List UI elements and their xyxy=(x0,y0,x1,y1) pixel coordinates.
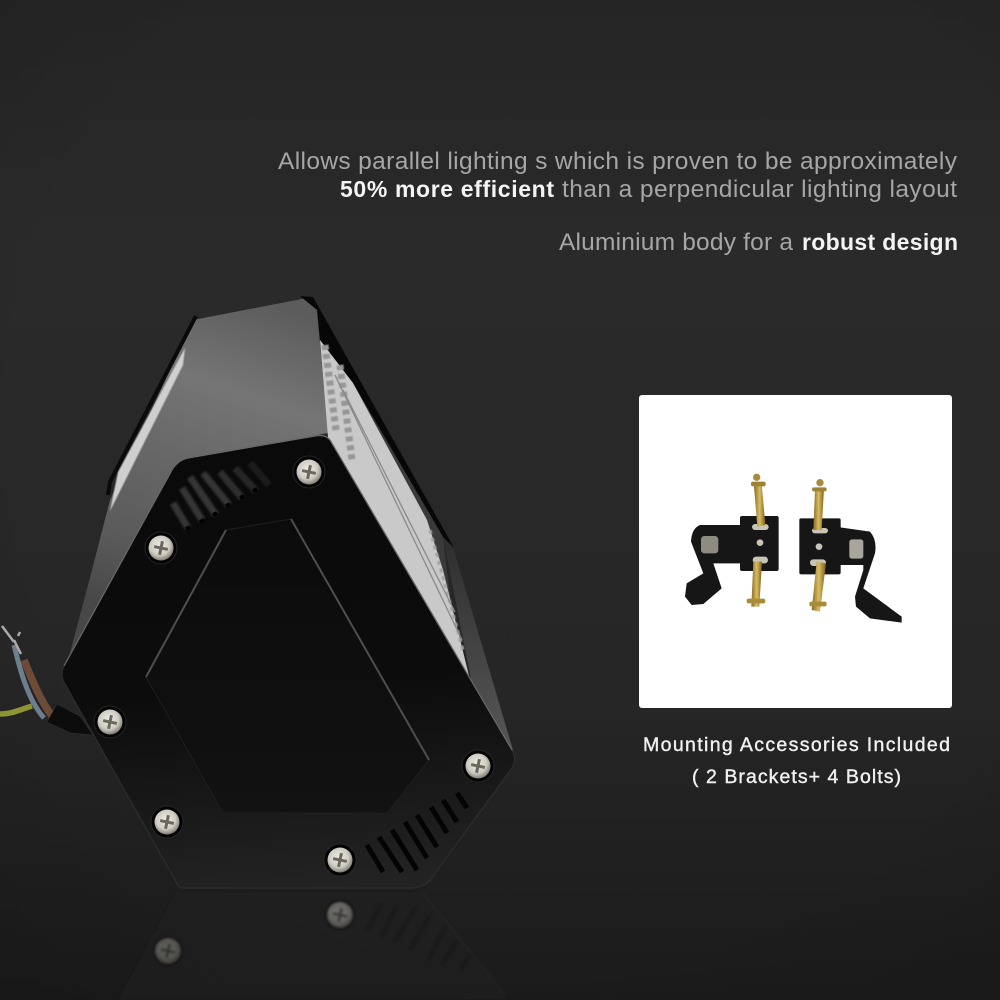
housing top face xyxy=(66,298,328,668)
headline text: parallel lighting: Allows parallel lighting s which is proven to be approximately xyxy=(278,148,958,175)
top vents xyxy=(173,463,269,529)
screws xyxy=(94,456,494,876)
end plate xyxy=(62,436,514,888)
left bracket and bolts xyxy=(685,474,779,607)
right black flange xyxy=(300,296,453,556)
caption: mounting accessories: Mounting Accessories Included xyxy=(643,734,950,756)
raised inner panel xyxy=(146,519,429,813)
right bracket and bolts xyxy=(799,479,902,623)
bottom vents xyxy=(367,793,467,872)
headline text: parallel lighting: than a perpendicular lighting layout xyxy=(562,176,957,203)
headline text: parallel lighting xyxy=(278,148,958,203)
panel: mounting accessories photo xyxy=(639,395,952,708)
LED strip xyxy=(320,340,470,680)
text: robust design xyxy=(559,229,958,256)
text: robust design: robust design xyxy=(802,229,958,255)
right side wall xyxy=(443,537,515,757)
text: robust design: Aluminium body for a xyxy=(559,229,793,256)
headline text: parallel lighting: 50% more efficient xyxy=(340,176,554,202)
fixture reflection xyxy=(118,892,507,1000)
left flange xyxy=(108,316,196,511)
caption: mounting accessories xyxy=(643,734,950,788)
cable xyxy=(0,626,93,735)
product: LED light fixture seen from end plate xyxy=(0,296,515,1000)
caption: mounting accessories: ( 2 Brackets+ 4 Bolts) xyxy=(692,766,901,788)
dark band between flange and strip xyxy=(353,383,455,640)
